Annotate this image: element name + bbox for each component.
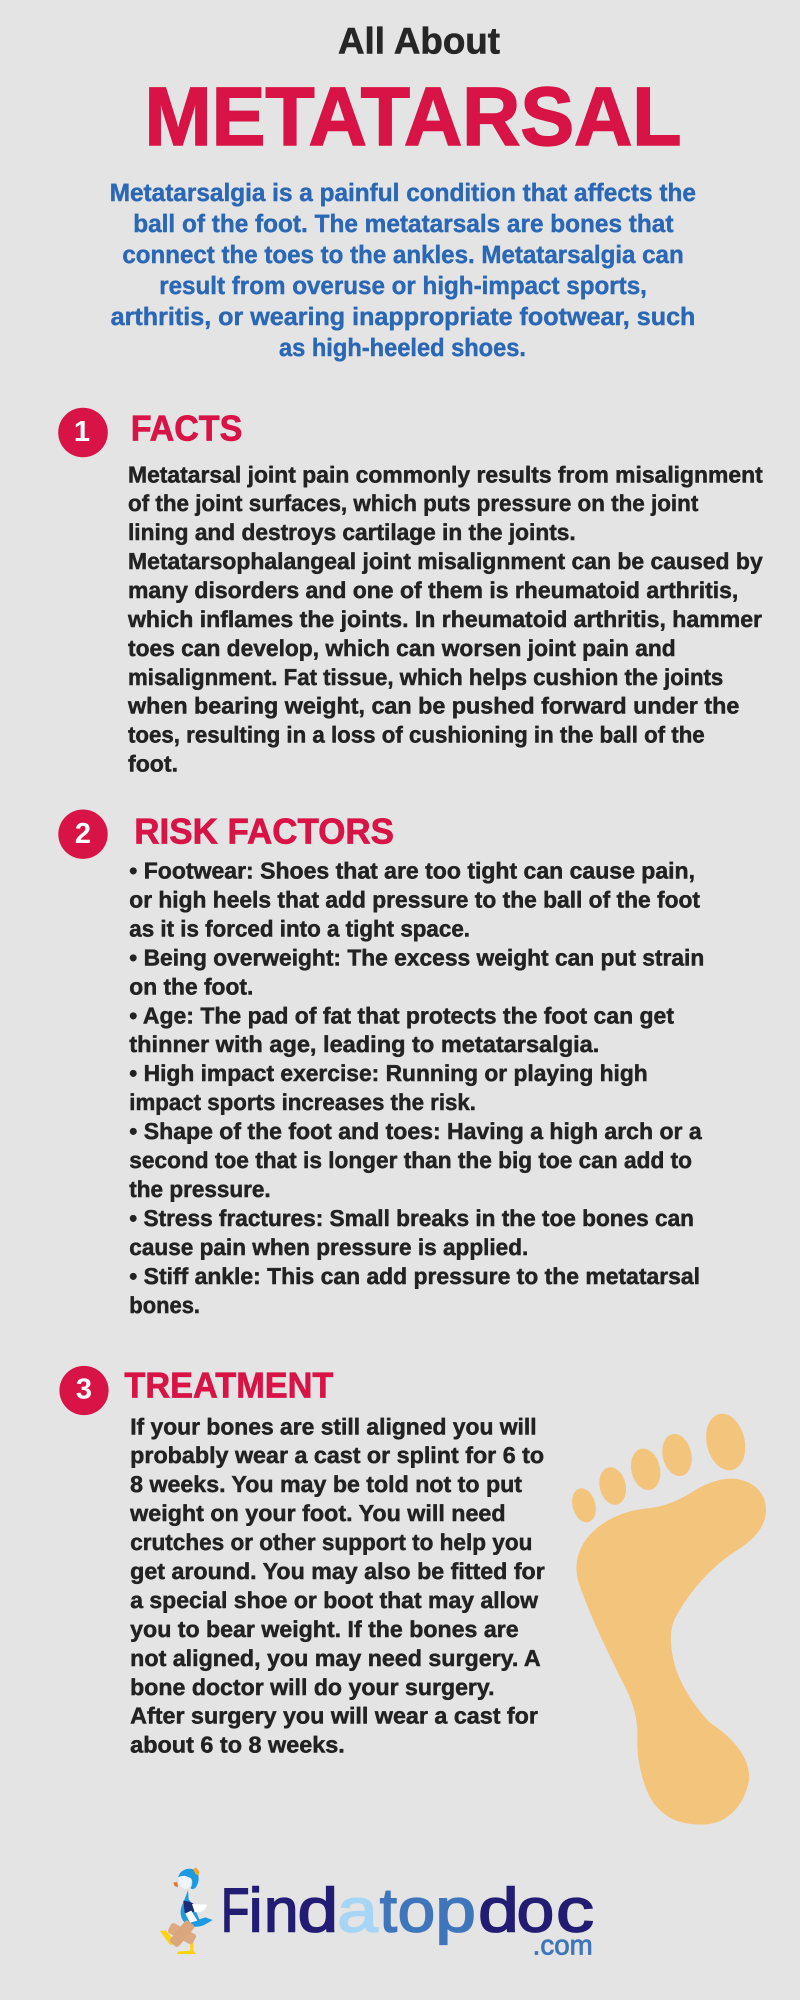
number badge 1 bbox=[58, 408, 108, 457]
intro paragraph: ball of the foot. The metatarsals are bones that bbox=[133, 210, 674, 238]
number badge 2: 2 bbox=[75, 818, 91, 850]
logo wordmark: o bbox=[517, 1877, 554, 1946]
treatment text block: probably wear a cast or splint for 6 to bbox=[130, 1442, 544, 1468]
treatment text block: not aligned, you may need surgery. A bbox=[130, 1645, 541, 1671]
risk factors list: second toe that is longer than the big toe can add to bbox=[129, 1147, 692, 1173]
logo wordmark: a bbox=[337, 1877, 378, 1946]
facts text block: many disorders and one of them is rheumatoid arthritis, bbox=[128, 577, 738, 603]
risk factors list: impact sports increases the risk. bbox=[129, 1089, 476, 1115]
facts text block: Metatarsal joint pain commonly results from misalignment bbox=[128, 461, 763, 487]
logo wordmark: in bbox=[249, 1877, 298, 1946]
number badge 2 bbox=[58, 810, 108, 859]
treatment text block: bone doctor will do your surgery. bbox=[130, 1674, 494, 1700]
number badge 3 bbox=[59, 1366, 109, 1415]
panel: treatment bbox=[59, 1365, 545, 1758]
risk factors list: the pressure. bbox=[129, 1176, 271, 1202]
intro paragraph: connect the toes to the ankles. Metatarsalgia can bbox=[122, 241, 684, 269]
logo suffix: .com: .com bbox=[533, 1930, 593, 1960]
risk factors list: • Age: The pad of fat that protects the foot can get bbox=[129, 1002, 674, 1028]
logo wordmark: p bbox=[435, 1877, 476, 1946]
intro paragraph: as high-heeled shoes. bbox=[279, 334, 526, 362]
treatment text block: crutches or other support to help you bbox=[130, 1529, 532, 1555]
treatment text block bbox=[129, 1413, 545, 1758]
facts text block: toes can develop, which can worsen joint pain and bbox=[128, 635, 676, 661]
logo wordmark: o bbox=[398, 1877, 435, 1946]
risk factors list: on the foot. bbox=[129, 973, 253, 999]
risk factors list: • High impact exercise: Running or playing high bbox=[129, 1060, 648, 1086]
logo icon: duck mascot bbox=[160, 1867, 213, 1954]
intro paragraph: arthritis, or wearing inappropriate footwear, such bbox=[111, 303, 695, 331]
logo wordmark: F bbox=[221, 1877, 249, 1946]
logo: Findatopdoc bbox=[160, 1867, 594, 1960]
number badge 1: 1 bbox=[74, 416, 90, 448]
treatment text block: If your bones are still aligned you will bbox=[130, 1413, 537, 1439]
heading: facts: FACTS bbox=[131, 408, 242, 449]
facts text block: Metatarsophalangeal joint misalignment can be caused by bbox=[128, 548, 763, 574]
risk factors list: • Being overweight: The excess weight can put strain bbox=[129, 944, 704, 970]
risk factors list: • Footwear: Shoes that are too tight can cause pain, bbox=[129, 858, 695, 884]
icon: foot bbox=[569, 1410, 766, 1825]
intro paragraph bbox=[110, 179, 696, 362]
heading: risk factors: RISK FACTORS bbox=[134, 810, 394, 851]
intro paragraph: result from overuse or high-impact sports, bbox=[159, 272, 647, 300]
risk factors list: thinner with age, leading to metatarsalgia. bbox=[129, 1031, 599, 1057]
logo wordmark: t bbox=[380, 1877, 397, 1946]
treatment text block: you to bear weight. If the bones are bbox=[130, 1616, 519, 1642]
panel: facts bbox=[58, 408, 763, 777]
facts text block bbox=[127, 461, 763, 777]
treatment text block: weight on your foot. You will need bbox=[129, 1500, 506, 1526]
intro paragraph: Metatarsalgia is a painful condition that affects the bbox=[110, 179, 696, 207]
risk factors list: or high heels that add pressure to the ball of the foot bbox=[129, 886, 700, 912]
risk factors list: bones. bbox=[129, 1292, 200, 1318]
facts text block: when bearing weight, can be pushed forward under the bbox=[127, 693, 739, 719]
treatment text block: After surgery you will wear a cast for bbox=[130, 1703, 538, 1729]
risk factors list bbox=[129, 858, 704, 1318]
logo wordmark: c bbox=[556, 1877, 594, 1946]
logo wordmark: d bbox=[478, 1877, 519, 1946]
risk factors list: • Stress fractures: Small breaks in the toe bones can bbox=[129, 1205, 694, 1231]
panel: risk factors bbox=[58, 810, 704, 1318]
facts text block: misalignment. Fat tissue, which helps cushion the joints bbox=[128, 664, 723, 690]
risk factors list: • Stiff ankle: This can add pressure to the metatarsal bbox=[129, 1263, 700, 1289]
title: All About: All About bbox=[338, 20, 500, 62]
risk factors list: • Shape of the foot and toes: Having a high arch or a bbox=[129, 1118, 702, 1144]
facts text block: which inflames the joints. In rheumatoid arthritis, hammer bbox=[127, 606, 762, 632]
facts text block: toes, resulting in a loss of cushioning in the ball of the bbox=[128, 722, 705, 748]
risk factors list: cause pain when pressure is applied. bbox=[129, 1234, 528, 1260]
treatment text block: 8 weeks. You may be told not to put bbox=[130, 1471, 522, 1497]
title: METATARSAL: METATARSAL bbox=[144, 70, 682, 163]
logo wordmark: d bbox=[298, 1877, 338, 1946]
treatment text block: a special shoe or boot that may allow bbox=[130, 1587, 538, 1613]
facts text block: lining and destroys cartilage in the joints. bbox=[128, 519, 576, 545]
treatment text block: about 6 to 8 weeks. bbox=[130, 1732, 345, 1758]
facts text block: of the joint surfaces, which puts pressure on the joint bbox=[128, 490, 699, 516]
number badge 3: 3 bbox=[76, 1374, 92, 1406]
risk factors list: as it is forced into a tight space. bbox=[129, 915, 470, 941]
heading: treatment: TREATMENT bbox=[124, 1365, 333, 1406]
facts text block: foot. bbox=[128, 751, 178, 777]
treatment text block: get around. You may also be fitted for bbox=[130, 1558, 545, 1584]
